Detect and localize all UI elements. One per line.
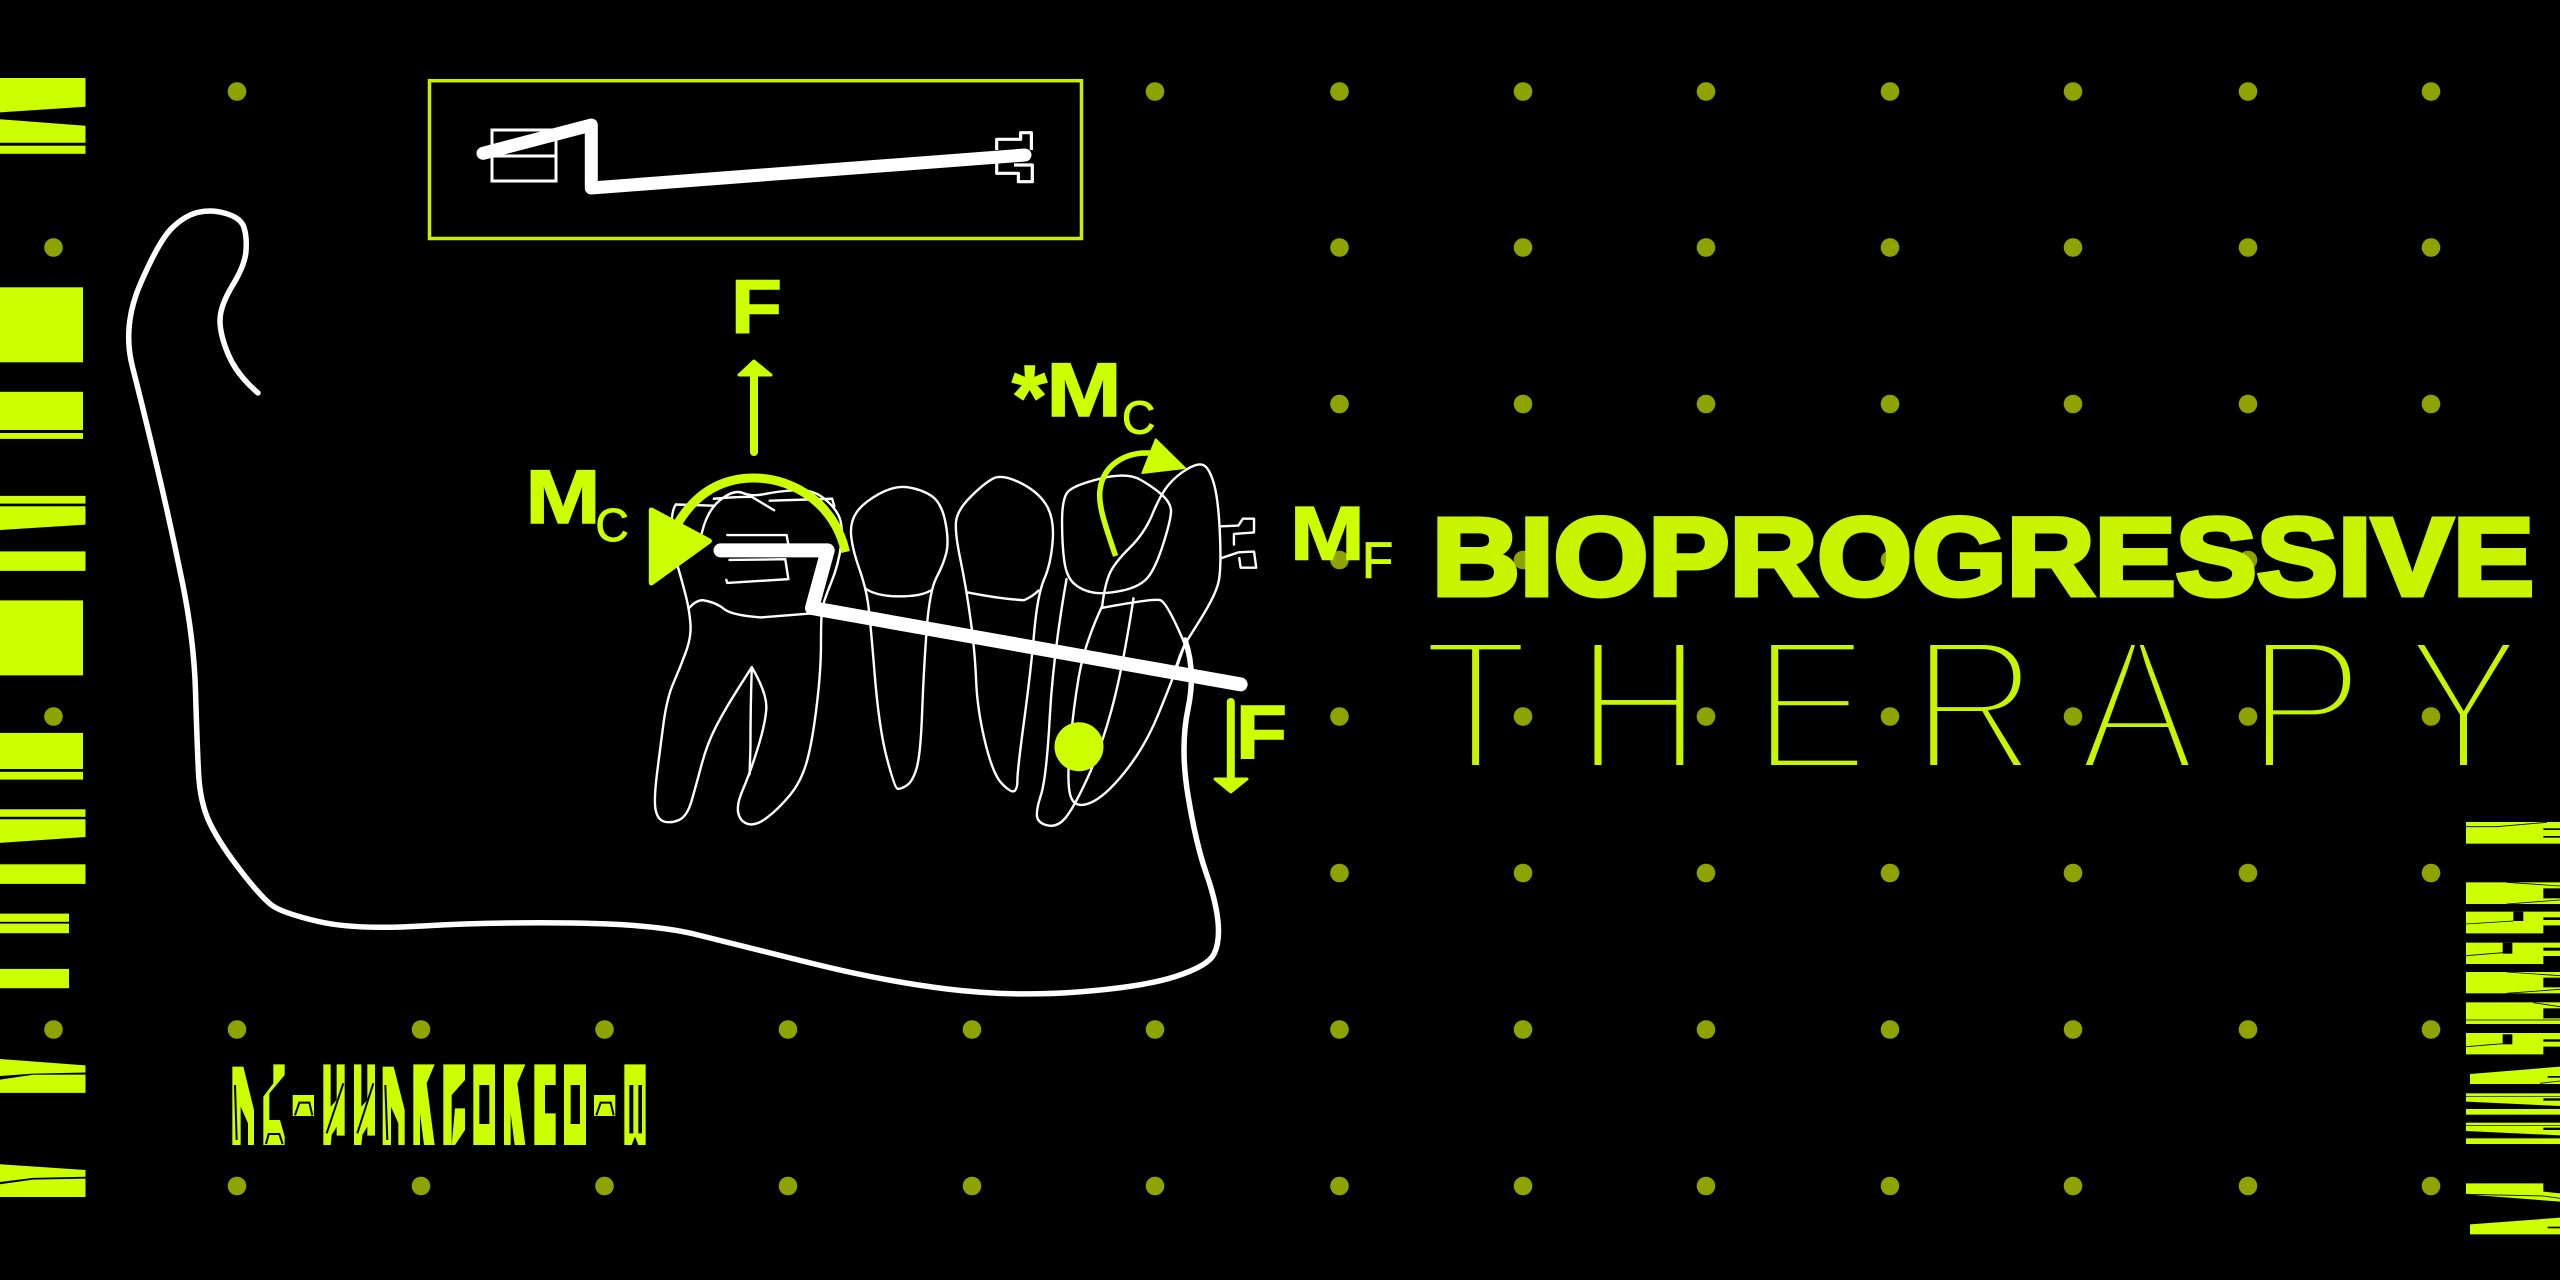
inset anterior bracket: [997, 133, 1032, 182]
label: F bottom: F: [1236, 690, 1287, 775]
label: Mf: F: [1362, 532, 1393, 589]
right decorative vertical strip: [2466, 822, 2560, 1234]
label: starred Mc: [1012, 348, 1155, 448]
label: Mc left: M: [526, 455, 600, 540]
tooth: first premolar: [956, 477, 1053, 791]
tooth: overlapping canine and incisor: [1037, 464, 1220, 826]
inset panel: wire diagram: [430, 81, 1082, 238]
tooth bracket: [1221, 519, 1256, 568]
tooth: molar: [655, 490, 842, 824]
inset wire: [483, 125, 1025, 188]
left decorative vertical strip: [0, 78, 86, 1197]
label: Mc left: [526, 455, 629, 551]
arrow: force up: [739, 361, 771, 452]
wire across teeth: [720, 550, 1241, 684]
title: BIOPROGRESSIVE: BIOPROGRESSIVE: [1432, 496, 2534, 619]
label: starred Mc: C: [1122, 392, 1155, 444]
title: THERAPY: THERAPY: [1422, 599, 2522, 810]
label: starred Mc: M: [1046, 348, 1122, 433]
label: F top: F: [731, 265, 782, 350]
decorative glyph band bottom left: [232, 1064, 646, 1145]
label: Mf: [1290, 491, 1393, 589]
arrow: small moment arc: [1100, 439, 1185, 556]
inset molar bracket: [492, 130, 556, 181]
tooth: second premolar: [851, 487, 948, 789]
label: Mc left: C: [596, 499, 629, 551]
label: Mf: M: [1290, 491, 1365, 576]
center of resistance dot: [1054, 722, 1104, 771]
label: starred Mc: *: [1012, 348, 1047, 448]
dots over the thin title line: [1330, 707, 2440, 726]
mandible outline: [129, 211, 1219, 994]
arrow: force down: [1215, 702, 1247, 792]
teeth outlines: [655, 464, 1256, 826]
arrow: large moment arc: [651, 478, 846, 583]
